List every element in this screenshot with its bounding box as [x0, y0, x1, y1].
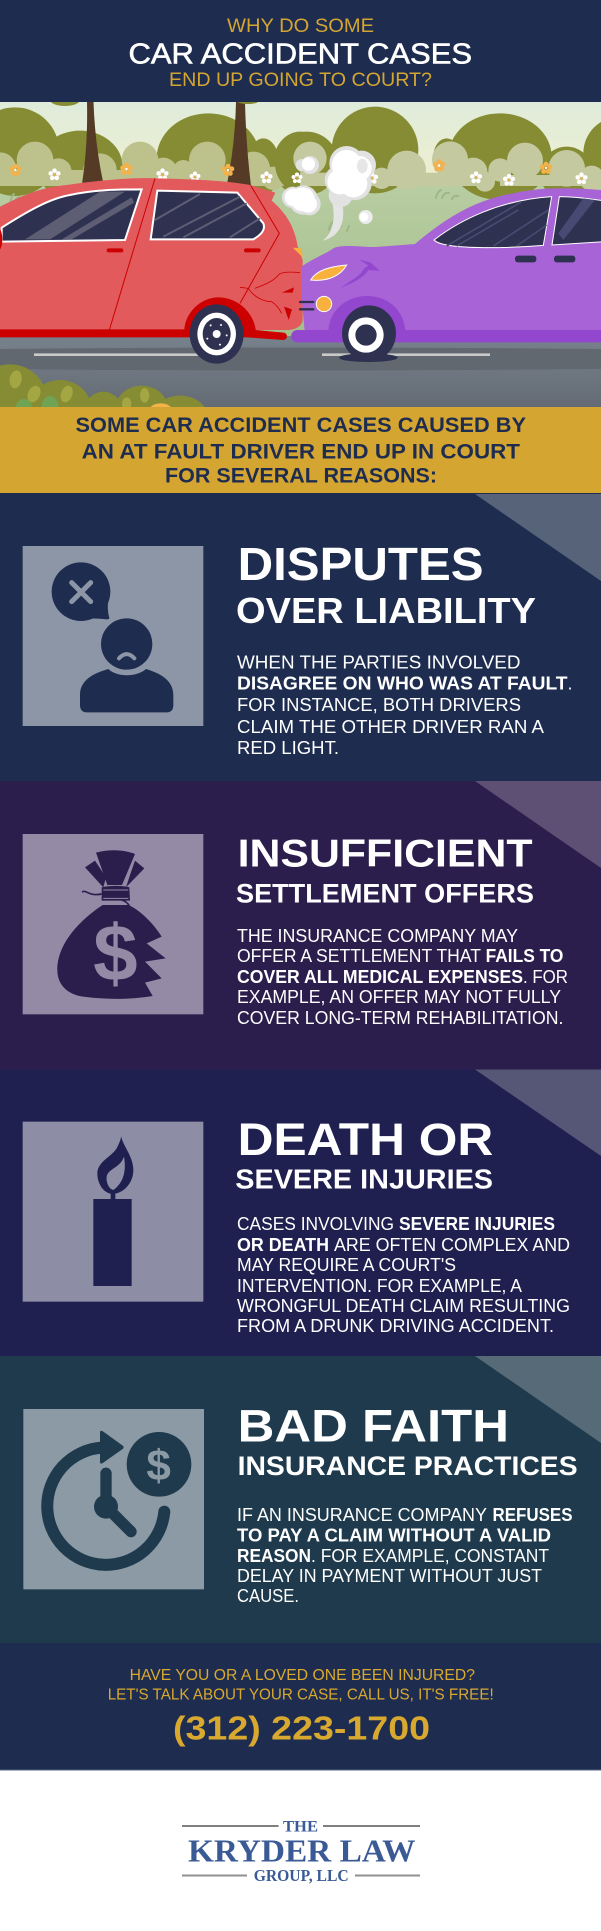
scenery background: [0, 102, 601, 407]
phone number: (312) 223-1700: [173, 1709, 430, 1746]
tail light: [293, 248, 303, 257]
window reflections: [25, 192, 134, 239]
body text: REFUSES: [492, 1505, 572, 1525]
title line 1: WHY DO SOME: [227, 15, 374, 37]
red car: [0, 178, 303, 364]
body text: EXAMPLE, AN OFFER MAY NOT FULLY: [237, 987, 561, 1007]
icon: money bag: $: [93, 909, 138, 998]
subheading: SEVERE INJURIES: [235, 1164, 493, 1195]
icon: money bag: [23, 834, 203, 1014]
heading: DEATH OR: [238, 1114, 493, 1165]
body text: CAUSE.: [237, 1586, 299, 1606]
body text: COVER ALL MEDICAL EXPENSES: [237, 967, 523, 987]
body text: [237, 926, 568, 1028]
title line 2: CAR ACCIDENT CASES: [128, 38, 472, 70]
body text: DELAY IN PAYMENT WITHOUT JUST: [237, 1566, 542, 1586]
corner triangle: [475, 781, 601, 868]
red car wheel: [190, 304, 244, 364]
panel: bad faith insurance practices: [0, 1356, 601, 1643]
body text: FAILS TO: [486, 946, 563, 966]
lane markings: [34, 353, 490, 356]
fog light: [316, 296, 332, 312]
body text: [237, 652, 573, 758]
panel: disputes over liability: [0, 493, 601, 781]
logo: the Kryder Law Group: THE: [283, 1818, 318, 1835]
flowers: [9, 159, 588, 186]
rear window: [2, 189, 142, 242]
flat tyre wheel: [339, 305, 398, 362]
body text: WRONGFUL DEATH CLAIM RESULTING: [237, 1296, 570, 1316]
body text: SEVERE INJURIES: [399, 1214, 555, 1234]
smoke: [282, 146, 376, 241]
icon: clock with dollar: [23, 1409, 204, 1589]
body text: RED LIGHT.: [237, 738, 339, 758]
body text: TO PAY A CLAIM WITHOUT A VALID: [237, 1525, 551, 1545]
damage cracks: [240, 272, 300, 313]
foreground bushes: [0, 364, 204, 407]
front window: [151, 191, 264, 239]
body text: . FOR EXAMPLE, CONSTANT: [311, 1546, 549, 1566]
body text: DISAGREE ON WHO WAS AT FAULT: [237, 673, 568, 693]
headlight: [311, 265, 347, 280]
purple car: [282, 146, 601, 362]
door lines: [109, 178, 279, 330]
heading: INSUFFICIENT: [238, 833, 533, 876]
title line 3: END UP GOING TO COURT?: [169, 69, 432, 91]
heading: DISPUTES: [238, 538, 484, 590]
corner triangle: [475, 1070, 601, 1156]
subheading: OVER LIABILITY: [236, 590, 536, 631]
front window reflections: [155, 194, 260, 237]
icon: candle: [23, 1122, 203, 1302]
hood dent: [341, 259, 380, 288]
heading: BAD FAITH: [238, 1400, 509, 1452]
banner line 1: SOME CAR ACCIDENT CASES CAUSED BY: [76, 414, 526, 437]
body text: IF AN INSURANCE COMPANY: [237, 1505, 487, 1525]
body text: [237, 1214, 570, 1336]
body text: THE INSURANCE COMPANY MAY: [237, 926, 518, 946]
body text: REASON: [237, 1546, 311, 1566]
wheel arch and sill: [0, 297, 287, 340]
body text: COVER LONG-TERM REHABILITATION.: [237, 1008, 563, 1028]
logo: the Kryder Law Group: GROUP, LLC: [254, 1866, 349, 1885]
grass tufts: [10, 190, 458, 231]
body text: CLAIM THE OTHER DRIVER RAN A: [237, 717, 544, 737]
body text: OR DEATH: [237, 1235, 329, 1255]
corner triangle: [475, 1356, 601, 1443]
tree trunks: [51, 102, 258, 186]
sill and wheel arch: [291, 296, 601, 342]
window reflections: [447, 202, 548, 246]
banner line 2: AN AT FAULT DRIVER END UP IN COURT: [82, 440, 520, 463]
body text: ARE OFTEN COMPLEX AND: [334, 1235, 570, 1255]
body text: WHEN THE PARTIES INVOLVED: [237, 652, 520, 672]
logo: the Kryder Law Group: [182, 1818, 420, 1885]
illustration: car crash scene: [0, 102, 601, 407]
banner line 3: FOR SEVERAL REASONS:: [165, 465, 437, 488]
door handles: [107, 248, 123, 252]
icon: clock with dollar: $: [146, 1441, 171, 1490]
body text: CASES INVOLVING: [237, 1214, 394, 1234]
call to action panel: [0, 1643, 601, 1770]
body text: FOR INSTANCE, BOTH DRIVERS: [237, 695, 521, 715]
purple car body: [301, 188, 601, 333]
header panel: [0, 0, 601, 102]
body text: FROM A DRUNK DRIVING ACCIDENT.: [237, 1316, 554, 1336]
logo: the Kryder Law Group: KRYDER LAW: [188, 1832, 416, 1868]
grille: [300, 302, 313, 309]
corner triangle: [475, 494, 601, 581]
panel: death or severe injuries: [0, 1070, 601, 1356]
panel: insufficient settlement offers: [0, 781, 601, 1070]
body text: . FOR: [523, 967, 568, 987]
body text: INTERVENTION. FOR EXAMPLE, A: [237, 1276, 522, 1296]
call to action line 1: HAVE YOU OR A LOVED ONE BEEN INJURED?: [130, 1667, 475, 1684]
gold intro banner: [0, 407, 601, 493]
side windows: [434, 197, 552, 248]
call to action line 2: LET'S TALK ABOUT YOUR CASE, CALL US, IT'S FREE!: [108, 1686, 494, 1703]
red car body: [0, 178, 303, 330]
body text: MAY REQUIRE A COURT'S: [237, 1255, 456, 1275]
subheading: INSURANCE PRACTICES: [238, 1451, 578, 1481]
subheading: SETTLEMENT OFFERS: [236, 878, 534, 908]
body text: .: [568, 673, 573, 693]
icon: person with speech bubble: [23, 546, 203, 726]
door handles: [515, 256, 536, 262]
body text: [237, 1505, 572, 1606]
body text: OFFER A SETTLEMENT THAT: [237, 946, 481, 966]
